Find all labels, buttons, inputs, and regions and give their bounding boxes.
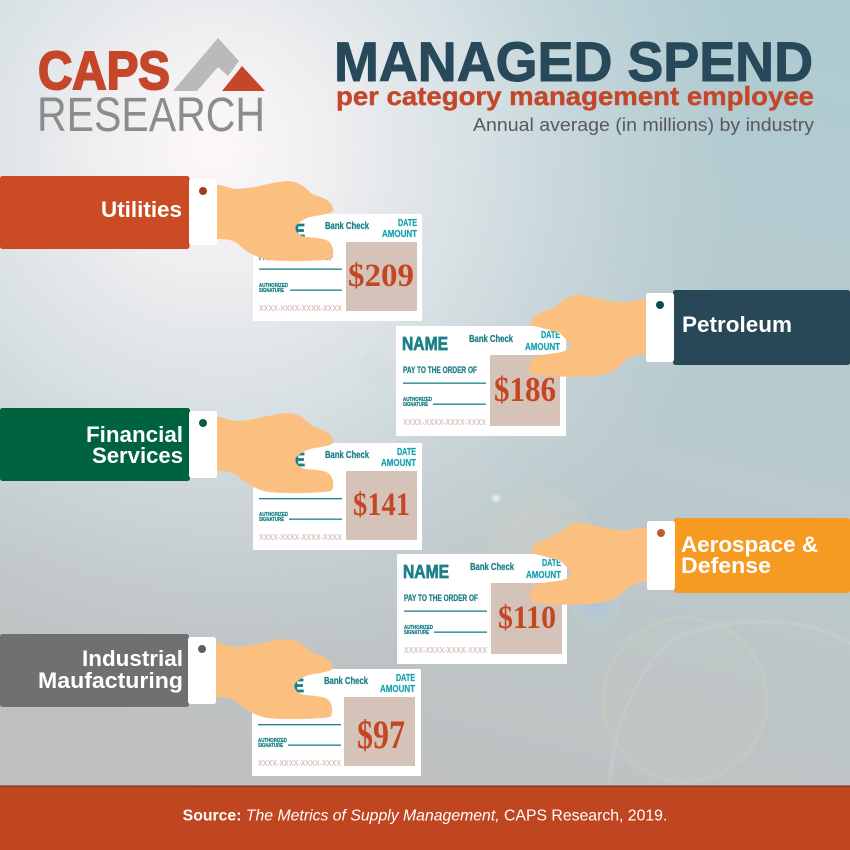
- check: Aerospace & Defense $110: [397, 554, 567, 664]
- label: Maufacturing: [38, 668, 183, 693]
- cuff: [189, 411, 217, 478]
- descriptor: Annual average (in millions) by industry: [473, 115, 814, 135]
- check: Utilities $209: $209: [348, 258, 414, 294]
- label: [86, 422, 183, 468]
- label: Services: [92, 443, 183, 468]
- cuff button: [199, 187, 207, 195]
- check: Financial Services $141: PAY TO THE ORDER OF: [259, 481, 333, 491]
- check: Financial Services $141: XXXX-XXXX-XXXX-XXXX: [259, 533, 343, 542]
- check: Industrial Manufacturing $97: $97: [357, 712, 405, 757]
- check: Industrial Manufacturing $97: [252, 669, 421, 776]
- check: Utilities $209: AUTHORIZED: [259, 283, 288, 289]
- sleeve label: Petroleum: [673, 290, 850, 365]
- check: Financial Services $141: [253, 443, 422, 550]
- sleeve label: Aerospace & Defense: [674, 518, 850, 593]
- check: Petroleum $186: $186: [494, 370, 556, 409]
- cuff: [646, 293, 674, 362]
- check: Petroleum $186: XXXX-XXXX-XXXX-XXXX: [403, 418, 487, 427]
- check: Petroleum $186: AUTHORIZED: [403, 397, 432, 403]
- hand shape: [529, 295, 646, 377]
- hand: Industrial Manufacturing: [0, 634, 332, 719]
- cuff button: [198, 645, 206, 653]
- check: Financial Services $141: AUTHORIZED: [259, 512, 288, 518]
- logo word CAPS: CAPS: [38, 41, 170, 101]
- check: Utilities $209: AMOUNT: [382, 229, 417, 240]
- hand: Financial Services: [0, 408, 333, 493]
- label: Financial: [86, 422, 183, 447]
- check: Industrial Manufacturing $97: NAME: [258, 676, 304, 696]
- cuff: [647, 521, 675, 590]
- cuff: [189, 179, 217, 245]
- check: Petroleum $186: SIGNATURE: [403, 402, 429, 408]
- footer band: [0, 786, 850, 850]
- check: Petroleum $186: Bank Check: [469, 334, 513, 345]
- check: Aerospace & Defense $110: DATE: [542, 558, 561, 569]
- check: Petroleum $186: PAY TO THE ORDER OF: [403, 365, 477, 375]
- check: Financial Services $141: DATE: [397, 447, 416, 458]
- check: Aerospace & Defense $110: NAME: [403, 562, 449, 582]
- check: Aerospace & Defense $110: $110: [498, 600, 556, 636]
- label: Utilities: [101, 197, 182, 222]
- check: Utilities $209: Bank Check: [325, 221, 369, 232]
- sleeve label: Utilities: [0, 176, 190, 249]
- check: Industrial Manufacturing $97: AUTHORIZED: [258, 738, 287, 744]
- title: MANAGED SPEND: [334, 30, 813, 93]
- check: Financial Services $141: NAME: [259, 450, 305, 470]
- logo word RESEARCH: RESEARCH: [37, 89, 265, 142]
- label: [681, 532, 818, 578]
- check: Aerospace & Defense $110: AUTHORIZED: [404, 625, 433, 631]
- check: Industrial Manufacturing $97: PAY TO THE ORDER OF: [258, 707, 332, 717]
- check: Industrial Manufacturing $97: Bank Check: [324, 676, 368, 687]
- check: Aerospace & Defense $110: Bank Check: [470, 562, 514, 573]
- logo: CAPS Research: [37, 38, 265, 142]
- check: Petroleum $186: [396, 326, 566, 436]
- check: Industrial Manufacturing $97: SIGNATURE: [258, 743, 284, 749]
- hand shape: [216, 639, 332, 719]
- cuff button: [656, 301, 664, 309]
- check: Aerospace & Defense $110: PAY TO THE ORDER OF: [404, 593, 478, 603]
- label: Aerospace &: [681, 532, 818, 557]
- check: Industrial Manufacturing $97: DATE: [396, 673, 415, 684]
- hand shape: [530, 523, 647, 605]
- check: Industrial Manufacturing $97: AMOUNT: [380, 684, 415, 695]
- check: Petroleum $186: DATE: [541, 330, 560, 341]
- hand shape: [217, 413, 333, 493]
- check: Financial Services $141: AMOUNT: [381, 458, 416, 469]
- check: Financial Services $141: Bank Check: [325, 450, 369, 461]
- sleeve label: Industrial Manufacturing: [0, 634, 189, 707]
- cuff button: [199, 419, 207, 427]
- logo red peak: [222, 66, 265, 91]
- check: Petroleum $186: AMOUNT: [525, 342, 560, 353]
- check: Utilities $209: [253, 214, 422, 321]
- cuff button: [657, 529, 665, 537]
- check: Utilities $209: SIGNATURE: [259, 288, 285, 294]
- hand: Petroleum: [529, 290, 850, 377]
- check: Financial Services $141: SIGNATURE: [259, 517, 285, 523]
- check: Aerospace & Defense $110: XXXX-XXXX-XXXX-XXXX: [404, 646, 488, 655]
- sleeve label: Financial Services: [0, 408, 190, 481]
- logo mountain: [173, 38, 239, 91]
- label: [38, 646, 183, 693]
- check: Aerospace & Defense $110: SIGNATURE: [404, 630, 430, 636]
- check: Utilities $209: NAME: [259, 221, 305, 241]
- check: Utilities $209: DATE: [398, 218, 417, 229]
- title block: [334, 30, 814, 135]
- check: Industrial Manufacturing $97: XXXX-XXXX-XXXX-XXXX: [258, 759, 342, 768]
- check: Financial Services $141: $141: [353, 487, 410, 523]
- check: Aerospace & Defense $110: AMOUNT: [526, 570, 561, 581]
- hand: Aerospace & Defense: [530, 518, 850, 605]
- hand: Utilities: [0, 176, 333, 261]
- label: Industrial: [82, 646, 183, 671]
- cuff: [188, 637, 216, 704]
- check: Utilities $209: XXXX-XXXX-XXXX-XXXX: [259, 304, 343, 313]
- label: Defense: [681, 553, 771, 578]
- subtitle: per category management employee: [336, 81, 814, 111]
- check: Utilities $209: PAY TO THE ORDER OF: [259, 252, 333, 262]
- check: Petroleum $186: NAME: [402, 334, 448, 354]
- source citation: Source: The Metrics of Supply Management, CAPS Research, 2019.: [183, 808, 667, 824]
- hand shape: [217, 181, 333, 261]
- label: Petroleum: [682, 312, 792, 337]
